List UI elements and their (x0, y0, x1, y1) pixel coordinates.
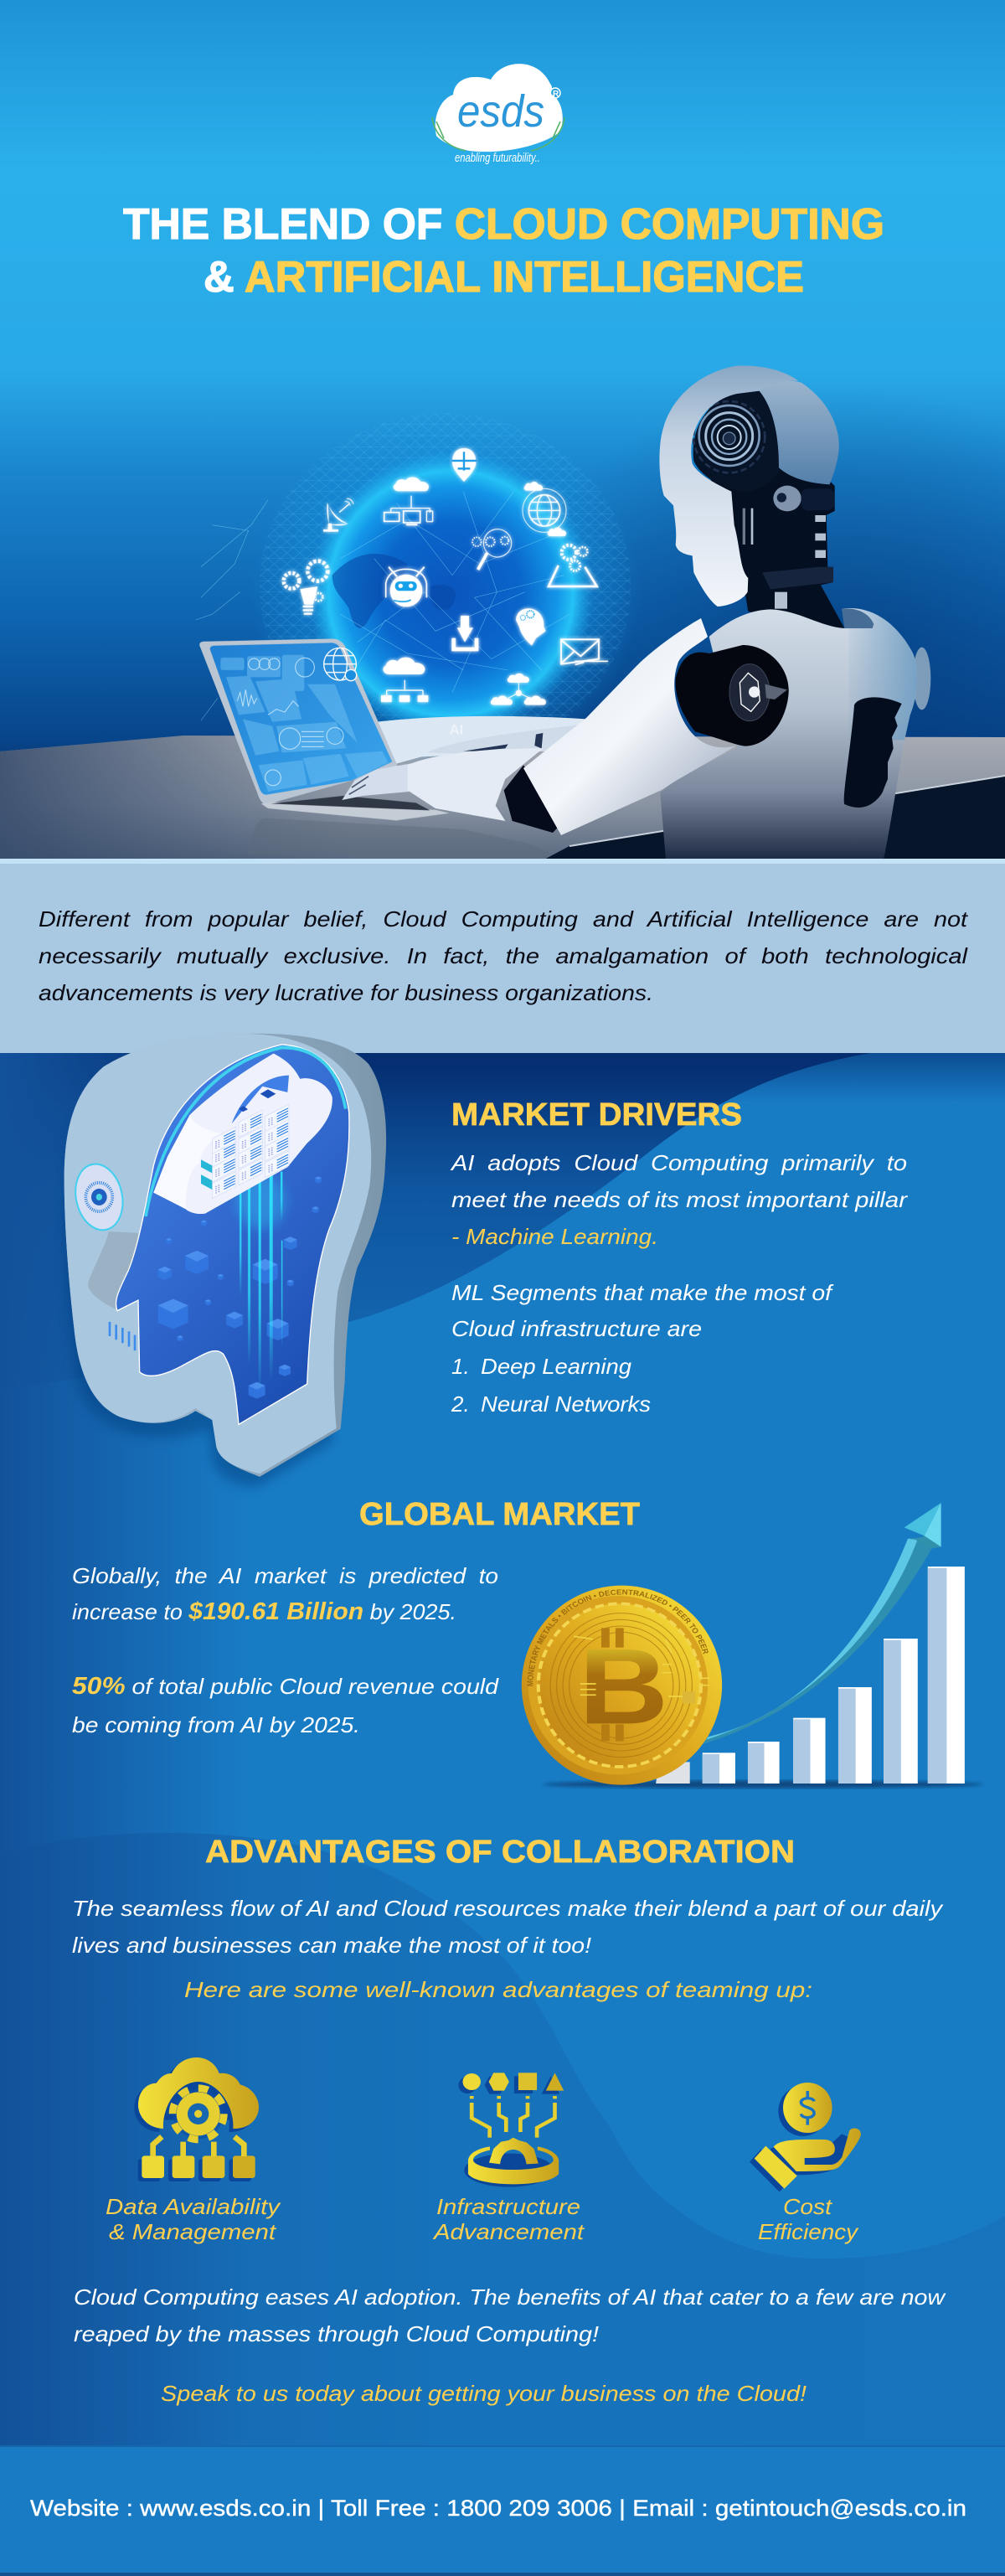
half gear (489, 2138, 539, 2164)
icon: satellite dish (323, 498, 353, 532)
icon: globe with clouds (523, 482, 566, 536)
neck pistons (743, 508, 826, 609)
icon: mail (561, 639, 608, 664)
dollar sign (801, 2091, 814, 2125)
left shade (0, 1053, 251, 2447)
bitcoin coin: MONETARY METALS • BITCOIN • DECENTRALIZED • PEER TO PEER (528, 1589, 709, 1686)
upper arm (523, 618, 737, 835)
bitcoin coin (521, 1585, 722, 1785)
main background (0, 1053, 1005, 2447)
ground shadow (543, 1780, 983, 1789)
table front edge (570, 776, 1005, 846)
robot hands (342, 725, 580, 821)
cloud (153, 1053, 332, 1214)
band rim (0, 859, 1005, 865)
stat 1 (72, 1563, 498, 1625)
coin (783, 2083, 832, 2133)
label: data availability (106, 2194, 281, 2244)
right-side vignette (486, 385, 1005, 955)
table left shade (0, 736, 352, 860)
upper wave (0, 1053, 871, 1391)
subheading: Here are some well-known advantages of teaming up: (184, 1977, 812, 2002)
head back depth (64, 1034, 386, 1477)
nodes (142, 2155, 255, 2178)
joint at wrist (504, 765, 564, 833)
bars (656, 1567, 965, 1784)
ear rings (693, 401, 765, 472)
lower wave (0, 1833, 1005, 2447)
icon: gears on tablet (549, 545, 597, 586)
contact line: Website : www.esds.co.in | Toll Free : 1800 209 3006 | Email : getintouch@esds.co.in (30, 2496, 966, 2521)
neck joint ball (773, 486, 834, 511)
continent shadows (332, 554, 456, 628)
top-right shade (0, 1053, 1005, 1103)
registered mark: R (553, 90, 559, 99)
intro line 1: Different from popular belief, Cloud Computing and Artificial Intelligence are not (39, 906, 969, 932)
circuit lines (472, 2096, 554, 2138)
blue cavity (116, 1045, 349, 1424)
hand cuff (755, 2146, 797, 2189)
head drop shadow (64, 1119, 335, 1487)
icon: infrastructure (458, 2073, 564, 2187)
shoulder nut (740, 673, 787, 711)
hand fingers (342, 763, 415, 800)
ring platform (468, 2146, 559, 2184)
shapes row (462, 2073, 564, 2091)
icon shadow (750, 2086, 853, 2192)
label: infrastructure (432, 2194, 585, 2244)
outer mesh halo (250, 413, 641, 771)
heading: ADVANTAGES OF COLLABORATION (205, 1835, 795, 1870)
segments: Neural Networks (481, 1391, 651, 1417)
vent bars (110, 1322, 135, 1350)
table glow behind hands (377, 716, 586, 765)
intro line 3: advancements is very lucrative for business organizations. (39, 980, 653, 1005)
eye sensor (69, 1159, 129, 1236)
world mesh (260, 413, 631, 760)
head illustration (64, 1034, 386, 1487)
icon: gears under magnifier (472, 529, 512, 570)
band fill (0, 864, 1005, 1054)
segments: ML Segments that make the most of (451, 1280, 834, 1305)
face shell (659, 365, 798, 607)
finger gaps (349, 777, 368, 794)
label: cost efficiency (758, 2194, 859, 2244)
cloud side facet (153, 1115, 224, 1209)
dashboard dials (237, 658, 343, 786)
footer bottom edge (0, 2573, 1005, 2576)
base fill (0, 1053, 1005, 2447)
cloud notch (232, 1076, 289, 1123)
circuit traces (574, 1636, 709, 1696)
laptop (199, 638, 553, 854)
laptop reflection (249, 818, 553, 854)
stat 2 (72, 1673, 500, 1737)
network lines (195, 492, 570, 720)
title line 1: THE BLEND OF CLOUD COMPUTING (123, 200, 884, 249)
label: infrastructure: Advancement (432, 2219, 585, 2244)
glowing disc (308, 451, 593, 736)
closing paragraph (74, 2284, 946, 2346)
hologram icons (284, 448, 608, 705)
label: infrastructure: Infrastructure (436, 2194, 580, 2219)
nose shade (88, 1231, 138, 1309)
neck collar (762, 567, 833, 589)
cubes (158, 1176, 322, 1399)
paragraph: meet the needs of its most important pillar (451, 1187, 909, 1212)
footer top edge (0, 2445, 1005, 2447)
icon shadow (458, 2076, 559, 2187)
heading: GLOBAL MARKET (359, 1497, 640, 1532)
global market (72, 1497, 983, 1789)
paragraph: - Machine Learning. (451, 1224, 658, 1249)
ear cavity (693, 391, 780, 492)
segments: Deep Learning (481, 1354, 632, 1379)
footer band (0, 2446, 1005, 2573)
rear hand detail (463, 733, 543, 751)
icon: globe on screen (324, 648, 357, 681)
rack teal screens (201, 1159, 212, 1190)
hand palm (774, 2129, 861, 2171)
stream glow (236, 1174, 286, 1228)
logo cloud (436, 64, 563, 152)
robot body (659, 365, 930, 860)
torso window (844, 697, 902, 808)
segments: Cloud infrastructure are (451, 1316, 702, 1341)
label: data availability: Data Availability (106, 2194, 281, 2219)
icon: download (451, 616, 478, 651)
data streams (240, 1172, 282, 1393)
coin and growth chart (521, 1503, 983, 1789)
stat 2: be coming from AI by 2025. (72, 1712, 360, 1737)
rising arrow (704, 1503, 941, 1744)
logo wordmark: esds (457, 86, 544, 137)
segments: 2. (451, 1391, 470, 1417)
laptop base (261, 802, 450, 820)
title (123, 200, 884, 302)
forearm sleeve (408, 748, 543, 821)
intro paragraph: The seamless flow of AI and Cloud resources make their blend a part of our daily (72, 1896, 944, 1921)
symbol ticks (606, 1628, 620, 1741)
call to action: Speak to us today about getting your business on the Cloud! (161, 2381, 807, 2406)
title line 2: & ARTIFICIAL INTELLIGENCE (204, 253, 804, 302)
gear (173, 2088, 224, 2140)
icon: cloud gear data (134, 2057, 259, 2181)
heading: MARKET DRIVERS (451, 1097, 742, 1133)
table surface (0, 736, 1005, 860)
shoulder slot (842, 608, 874, 628)
footer (0, 2445, 1005, 2576)
cloud (138, 2057, 259, 2129)
head front face (64, 1034, 371, 1474)
stat 1: increase to $190.61 Billion by 2025. (72, 1598, 456, 1625)
closing paragraph: Cloud Computing eases AI adoption. The benefits of AI that cater to a few are now (74, 2284, 946, 2310)
icon: brain head (516, 608, 546, 646)
icon: cost efficiency (750, 2083, 861, 2192)
AI watermark: AI (450, 722, 463, 738)
rear forearm (427, 725, 580, 754)
logo hands (432, 117, 564, 151)
icon: plane pin (451, 448, 477, 482)
logo tagline: enabling futurability.. (455, 152, 540, 165)
bitcoin symbol: B (579, 1626, 668, 1747)
label: cost efficiency: Cost (783, 2194, 833, 2219)
coin contact pad (683, 1691, 695, 1703)
intro paragraph (72, 1896, 944, 1958)
laptop screen (210, 643, 392, 795)
icon shadow (134, 2061, 255, 2181)
dashboard panels (220, 655, 388, 792)
cavity cyan rim (146, 1047, 346, 1216)
registered mark (550, 88, 560, 99)
back bulge (913, 648, 930, 710)
intro paragraph: lives and businesses can make the most of it too! (72, 1933, 591, 1958)
stat 2: 50% of total public Cloud revenue could (72, 1673, 500, 1700)
neck (709, 463, 844, 628)
connectors (153, 2137, 244, 2156)
icon: cloud with devices (384, 478, 433, 525)
keyboard (271, 796, 430, 810)
paragraph: AI adopts Cloud Computing primarily to (450, 1150, 907, 1175)
segments (451, 1280, 834, 1417)
torso blue tint (842, 608, 917, 740)
light band (0, 859, 1005, 1054)
segments: 1. (451, 1354, 470, 1379)
shoulder disc (729, 664, 770, 721)
logo: esds (432, 64, 564, 165)
table front shadow (544, 776, 1005, 860)
shoulder socket (676, 645, 789, 746)
paragraph (450, 1150, 909, 1249)
server racks (212, 1104, 289, 1199)
icon: cloud tree (381, 658, 428, 702)
intro line 2: necessarily mutually exclusive. In fact, the amalgamation of both technological (39, 943, 968, 968)
market drivers (450, 1097, 909, 1417)
holographic scene (195, 413, 641, 854)
icon: bulb with gears (284, 561, 327, 614)
torso (660, 608, 917, 860)
laptop lid (199, 638, 398, 805)
coin rim text (533, 1594, 708, 1686)
rear skull plate (760, 381, 839, 484)
banner background (0, 0, 1005, 860)
stat 1: Globally, the AI market is predicted to (72, 1563, 498, 1588)
closing paragraph: reaped by the masses through Cloud Computing! (74, 2321, 599, 2346)
label: data availability: & Management (109, 2219, 277, 2244)
intro text (39, 906, 969, 1005)
advantages of collaboration (72, 1835, 946, 2406)
rack top chips (239, 1089, 276, 1112)
label: cost efficiency: Efficiency (758, 2219, 859, 2244)
icon: three clouds (491, 674, 546, 705)
icon: bot (386, 567, 426, 607)
